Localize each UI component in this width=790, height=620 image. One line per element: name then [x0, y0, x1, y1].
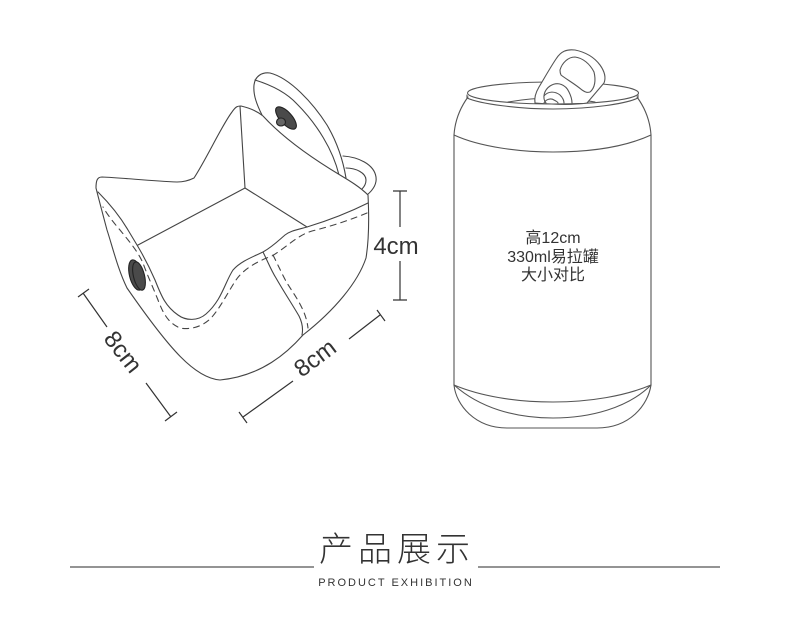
can rim [467, 82, 638, 109]
can body [454, 97, 651, 428]
stitching [103, 207, 367, 329]
flap with snap [254, 73, 346, 178]
carrying loop [343, 156, 376, 195]
dimension: right 8cm [239, 310, 385, 423]
heading title: 产品展示 [319, 531, 475, 569]
purse body outline [96, 106, 369, 380]
snap button [272, 104, 300, 132]
illustration: coin purse [96, 73, 376, 380]
heading rules [70, 566, 720, 568]
dimension: left 8cm [78, 289, 177, 421]
pull tab [535, 50, 605, 104]
can label text [507, 229, 599, 284]
lower bands [454, 385, 651, 418]
section heading [70, 531, 720, 589]
illustration: 330ml can [454, 50, 651, 428]
dimension: right 8cm: 8cm [289, 334, 342, 383]
inner rim [98, 192, 368, 319]
can label text: 高12cm [525, 229, 581, 247]
dimension: height 4cm [373, 191, 419, 300]
interior fold lines [138, 106, 307, 245]
dimension: left 8cm: 8cm [98, 326, 147, 378]
heading subtitle: PRODUCT EXHIBITION [318, 577, 474, 589]
side snap button [126, 258, 148, 292]
side seam [263, 252, 303, 335]
can label text: 大小对比 [521, 266, 585, 284]
seam stitching [273, 255, 308, 328]
can label text: 330ml易拉罐 [507, 248, 599, 266]
upper band [454, 135, 651, 152]
dimension: height 4cm: 4cm [373, 233, 419, 260]
